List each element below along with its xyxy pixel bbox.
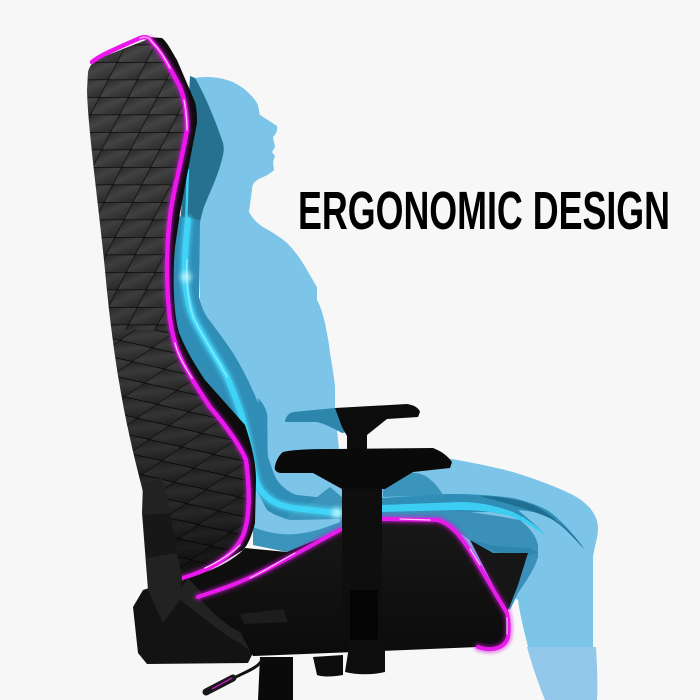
quilted leather panel	[87, 40, 246, 572]
rear armrest in blue shadow	[285, 408, 348, 433]
ergonomic shell band	[171, 215, 345, 520]
cyan light strip	[185, 170, 338, 513]
mesh under seat front	[470, 540, 528, 613]
rear armrest	[335, 404, 420, 452]
spine shell shadow in headrest	[178, 76, 224, 250]
panel shading	[90, 130, 246, 576]
black rim	[130, 37, 256, 585]
front armrest pad	[275, 448, 452, 489]
seat shell band and thigh curves	[382, 473, 585, 610]
armrest post	[313, 488, 385, 676]
light flare upper	[181, 272, 191, 282]
infographic canvas	[87, 34, 668, 700]
seat side panel	[198, 518, 509, 656]
side recline bracket	[142, 478, 253, 653]
upper lumbar bump	[258, 398, 268, 445]
height lever	[206, 660, 262, 692]
magenta edge light on seat	[198, 519, 509, 649]
light flare lower	[332, 508, 342, 518]
chair base	[133, 578, 253, 664]
gas lift	[258, 657, 293, 700]
seat dark trim and vent	[240, 609, 288, 624]
magenta edge light on back	[92, 37, 249, 578]
lower leg, lighter shin	[527, 647, 597, 700]
lower cushion left of post	[253, 487, 345, 552]
seated person silhouette	[195, 77, 598, 700]
black under-back wedge	[183, 530, 340, 598]
chair back	[87, 34, 256, 582]
